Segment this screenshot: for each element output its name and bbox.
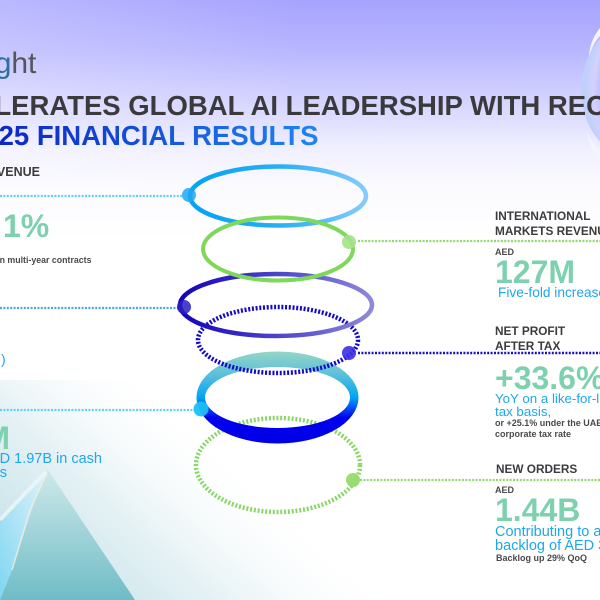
dot: new orders	[346, 473, 360, 487]
dot: third left metric	[194, 402, 208, 416]
ring: thick gradient	[196, 351, 359, 444]
ring: dashed blue	[198, 307, 358, 373]
panel: net profit after tax: or +25.1% under the UAE	[495, 418, 600, 428]
panel: international markets revenue: 127M	[495, 254, 575, 290]
panel: net profit after tax: NET PROFIT	[495, 324, 565, 338]
panel: third left metric	[0, 420, 102, 481]
panel: net profit after tax: tax basis,	[495, 404, 551, 419]
panel: net profit after tax: corporate tax rate	[495, 429, 571, 439]
panel: new orders	[495, 462, 600, 563]
ring: dashed green	[196, 418, 360, 512]
panel: international markets revenue	[495, 209, 600, 300]
panel: new orders: Contributing to a	[495, 524, 600, 540]
connector: international revenue	[358, 240, 600, 242]
panel: new orders: NEW ORDERS	[496, 462, 577, 476]
panel: second left metric: )	[1, 351, 6, 367]
connector: recurring revenue	[0, 195, 183, 197]
dot: international revenue	[342, 235, 356, 249]
connector: net profit	[358, 352, 600, 354]
panel: recurring revenue: 1%	[3, 208, 49, 244]
dot: second left metric	[177, 300, 191, 314]
panel: international markets revenue: INTERNATIONAL	[495, 209, 590, 223]
title	[0, 90, 600, 151]
dot: net profit	[342, 346, 356, 360]
panel: new orders: Backlog up 29% QoQ	[496, 553, 587, 563]
panel: net profit after tax: AFTER TAX	[495, 339, 560, 353]
panel: recurring revenue	[0, 165, 92, 265]
connector: second left metric	[0, 307, 178, 309]
panel: international markets revenue: AED	[495, 247, 514, 257]
ring: indigo	[180, 274, 372, 336]
connector: new orders	[360, 479, 600, 481]
dot: recurring revenue	[182, 188, 196, 202]
panel: new orders: 1.44B	[495, 492, 580, 528]
connector: third left metric	[0, 409, 195, 411]
ring: blue	[190, 166, 366, 226]
ring: green	[203, 218, 353, 280]
panel: new orders: AED	[495, 485, 514, 495]
panel: net profit after tax	[495, 324, 600, 439]
